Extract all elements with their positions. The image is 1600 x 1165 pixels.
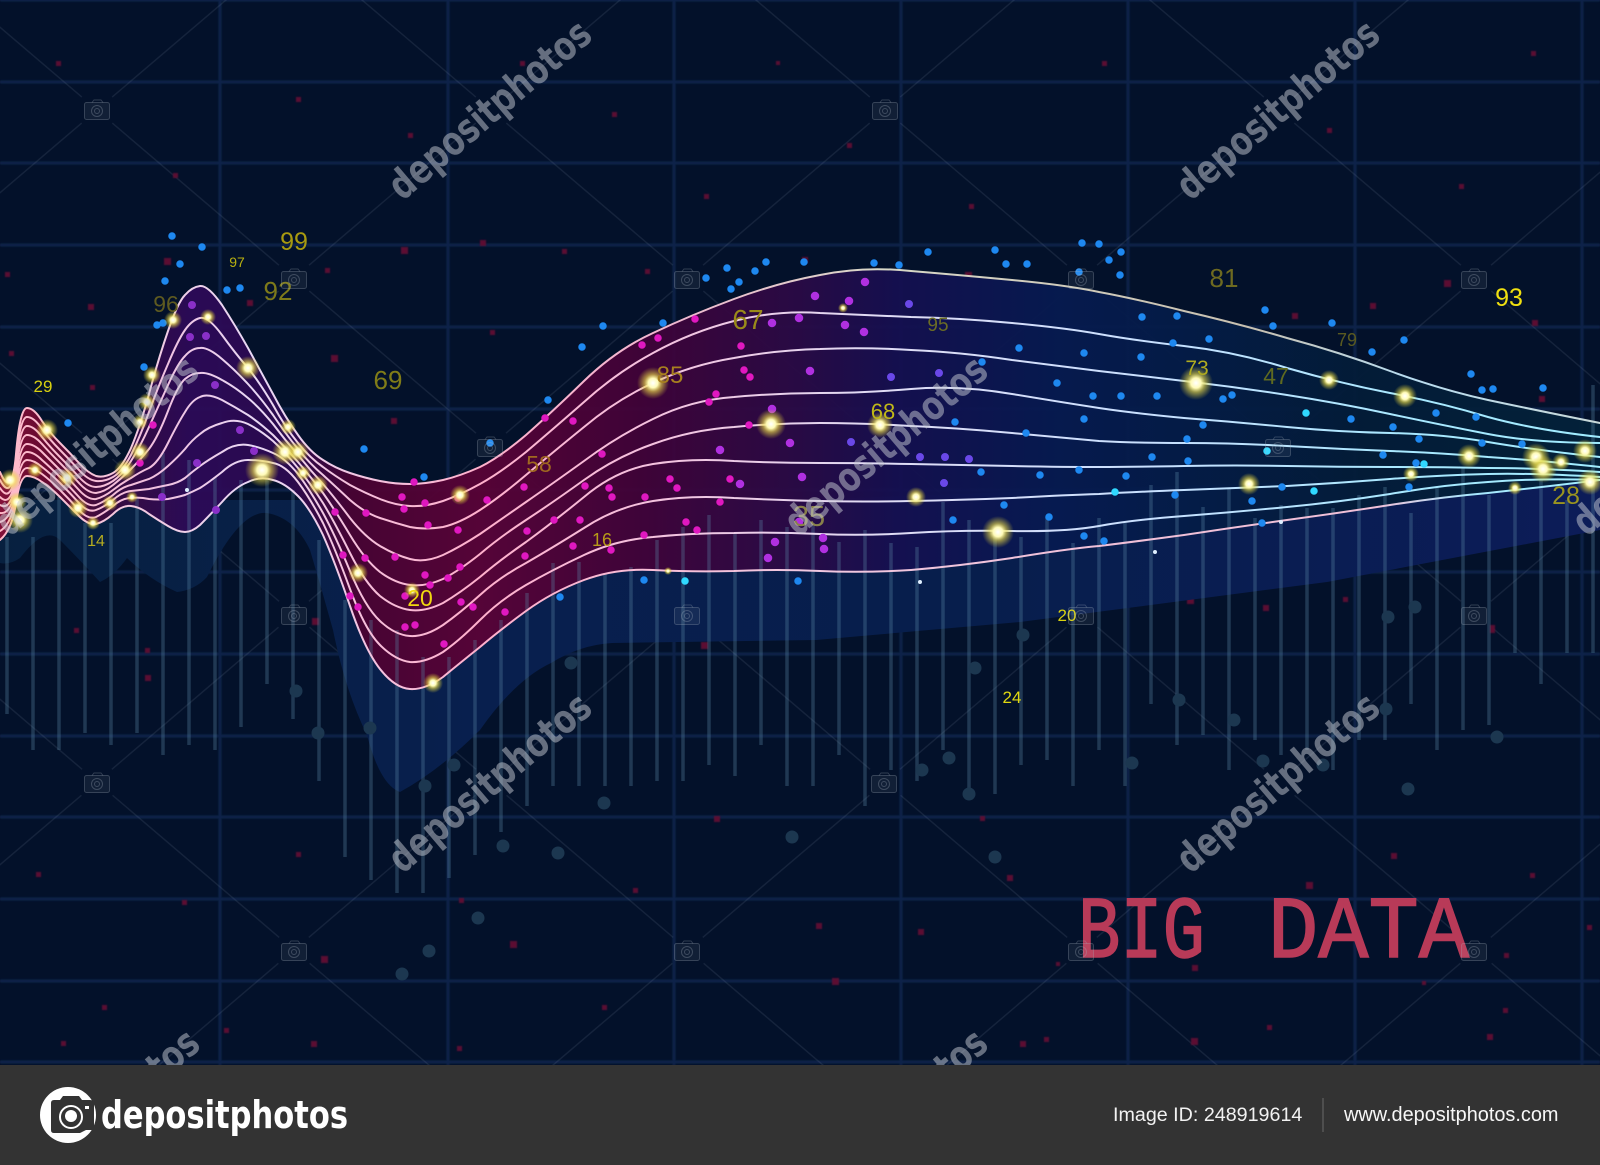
logo wordmark: depositphotos [101, 1093, 348, 1137]
label 68: 68 [871, 399, 895, 424]
label 96: 96 [153, 291, 179, 317]
label 67: 67 [732, 304, 764, 335]
line 5 [0, 396, 1600, 585]
data points scatter [68, 236, 1543, 644]
website url: www.depositphotos.com [1343, 1104, 1558, 1126]
label 81: 81 [1210, 263, 1238, 293]
title: BIG DATA: BIG [1078, 885, 1205, 984]
label 29: 29 [34, 377, 52, 396]
label 95: 95 [927, 315, 949, 336]
label 35: 35 [793, 501, 825, 533]
magenta dots [140, 319, 750, 644]
footer bar [0, 1065, 1600, 1165]
watermark texts: depositphotos [775, 347, 997, 545]
line 7 [0, 445, 1600, 636]
violet dots [720, 282, 865, 558]
label 28: 28 [1552, 482, 1580, 510]
vertical bar chart [7, 385, 1593, 893]
dots below chart [296, 607, 1497, 974]
ribbon lines [0, 269, 1600, 689]
glowing data points [0, 303, 1600, 693]
line 4 [0, 373, 1600, 560]
label 58: 58 [526, 451, 552, 477]
white-blue dots [187, 490, 1281, 582]
label 79: 79 [1337, 330, 1357, 350]
label 93: 93 [1495, 284, 1523, 312]
indigo dots [851, 304, 969, 483]
blue shadow area under ribbon [0, 470, 1600, 792]
purple dots in hump [162, 305, 254, 510]
line 9 bottom edge [0, 476, 1600, 689]
label 92: 92 [264, 276, 292, 306]
blue dots [68, 236, 1543, 597]
watermark cameras [84, 100, 1486, 960]
icon: camera logo [40, 1087, 96, 1143]
number labels [34, 228, 1580, 707]
label 69: 69 [374, 365, 402, 395]
label 20 on ribbon: 20 [407, 585, 433, 611]
title: BIG DATA [1078, 885, 1469, 984]
wave ribbon fill [0, 269, 1600, 689]
image id: Image ID: 248919614 [1113, 1104, 1302, 1126]
line 8 [0, 460, 1600, 662]
label 97: 97 [229, 254, 245, 270]
label 85: 85 [657, 362, 683, 389]
label 47: 47 [1263, 363, 1289, 389]
title: BIG DATA: DATA [1268, 885, 1469, 984]
cyan dots [685, 413, 1424, 581]
line 3 [0, 348, 1600, 528]
footer divider [1322, 1098, 1324, 1132]
label 16: 16 [592, 530, 612, 550]
label 24: 24 [1003, 688, 1021, 707]
watermark texts: depositphotos [1167, 684, 1389, 882]
line 6 [0, 421, 1600, 610]
line 2 [0, 312, 1600, 506]
watermark texts: depositphotos [379, 684, 601, 882]
label 99: 99 [280, 228, 308, 256]
line 1 top edge [0, 269, 1600, 484]
label 14: 14 [87, 533, 105, 550]
label 20 lower: 20 [1058, 606, 1076, 625]
label 73: 73 [1185, 357, 1209, 380]
